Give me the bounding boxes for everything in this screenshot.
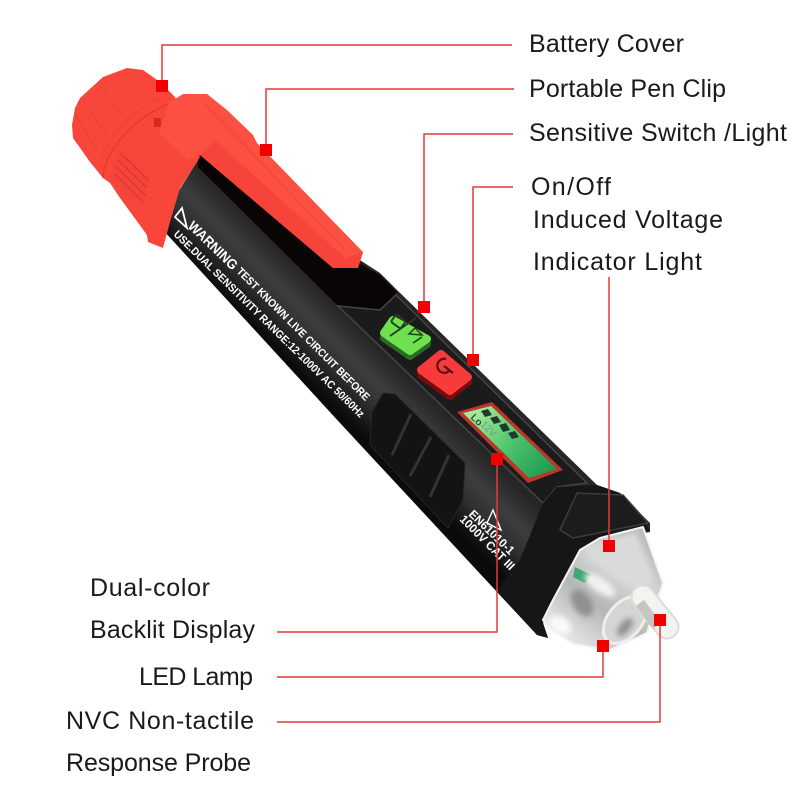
- callout: induced voltage indicator light: Indicator Light: [533, 248, 702, 276]
- callout: sensitive switch: Sensitive Switch /Light: [529, 119, 787, 147]
- callout: NVC probe: NVC Non-tactile: [66, 707, 254, 735]
- callout: sensitive switch: [418, 119, 787, 313]
- callout: dual-color backlit display: Dual-color: [90, 574, 210, 602]
- LCD display: Lo: [468, 412, 484, 429]
- callout: LED lamp: [139, 640, 609, 691]
- callout: dual-color backlit display: Backlit Display: [90, 616, 256, 644]
- callout: on/off: On/Off: [531, 173, 611, 201]
- LCD display: [457, 402, 563, 483]
- callout: NVC probe: Response Probe: [66, 749, 251, 777]
- probe: [640, 597, 667, 627]
- callout: battery cover: [156, 30, 684, 92]
- warning text on body: USE.DUAL SENSITIVITY RANGE:12-1000V AC 50/60Hz: [171, 229, 367, 421]
- red power button: [421, 354, 468, 396]
- callout: NVC probe: [66, 614, 666, 777]
- LCD display: 12V: [478, 419, 499, 440]
- green sensitivity button: [384, 314, 427, 356]
- red battery cap: [72, 68, 200, 248]
- warning text on body: TEST KNOWN LIVE CIRCUIT BEFORE: [234, 266, 372, 404]
- callout: induced voltage indicator light: [533, 206, 723, 552]
- transparent lens tip: [543, 527, 663, 652]
- callout: pen clip: [260, 75, 726, 156]
- button recess: [338, 295, 587, 503]
- pen body: [163, 157, 650, 638]
- certification text: EN61010-1: [466, 507, 518, 558]
- warning text on body: WARNING: [185, 218, 241, 273]
- callout: dual-color backlit display: [90, 453, 503, 644]
- callout: battery cover: Battery Cover: [529, 30, 684, 58]
- tester pen illustration: [72, 68, 667, 652]
- grip ridges: [370, 393, 465, 528]
- callout: LED lamp: LED Lamp: [139, 663, 253, 691]
- callout: pen clip: Portable Pen Clip: [529, 75, 726, 103]
- callout: induced voltage indicator light: Induced Voltage: [533, 206, 723, 234]
- red pen clip: [160, 94, 363, 268]
- callout: on/off: [467, 173, 611, 366]
- lower front collar: [497, 485, 650, 638]
- shadow beneath clip: [198, 150, 397, 310]
- certification text: 1000V CAT III: [457, 512, 518, 573]
- head facet: [560, 493, 648, 538]
